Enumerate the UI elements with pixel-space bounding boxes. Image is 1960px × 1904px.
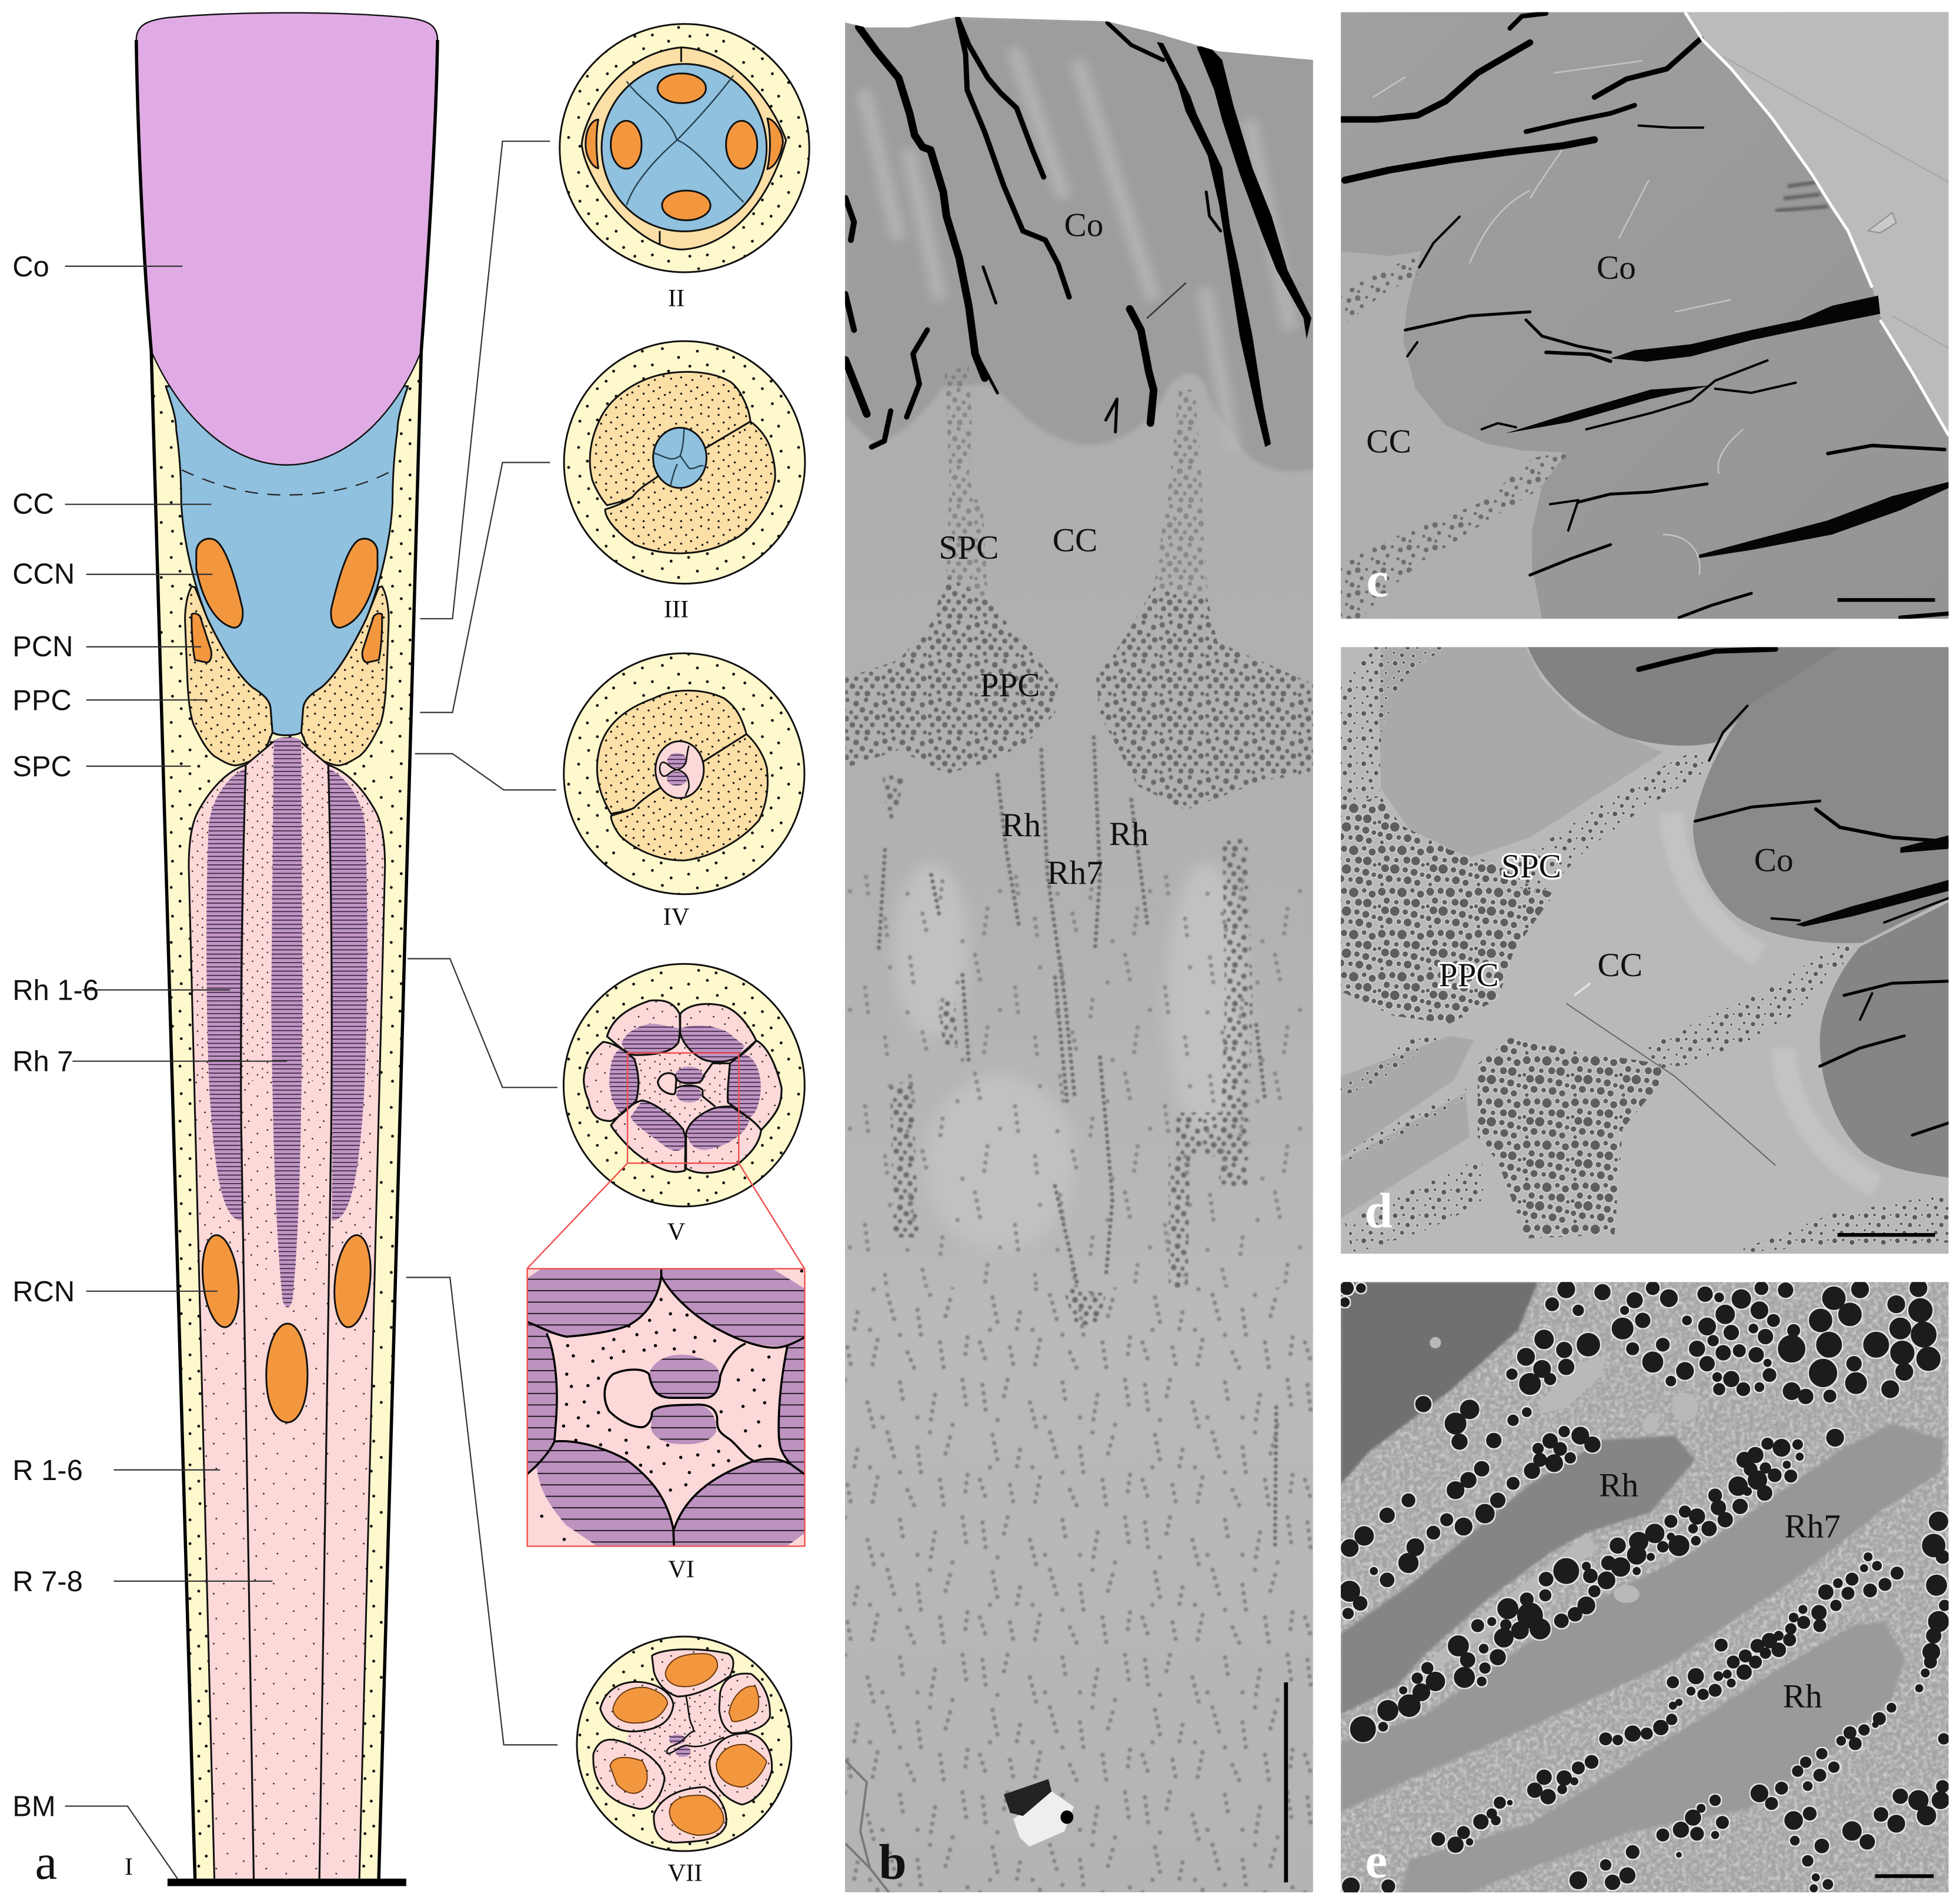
six cells [593,1649,772,1843]
cell outlines [584,1000,782,1173]
cornea tissue [846,18,1316,472]
leader lines and labels: Co [12,251,49,283]
rhabdom fragments [667,753,687,786]
panel b labels: Co [1064,207,1103,244]
granule clusters [846,366,1313,810]
wide cracks [1506,296,1949,558]
label VII: VII [667,1859,702,1887]
granule streams [1341,255,1570,619]
wide fractures [1157,42,1311,447]
cone divisions [654,429,703,486]
lighter rhabdom areas [894,863,1246,1250]
specimen edge gap [1685,12,1949,435]
panel d labels: SPC [1501,848,1561,885]
panel letter d: d [1365,1183,1393,1238]
nuclei [586,74,783,221]
light scratches [1373,61,1744,575]
panel b labels: Rh [1001,807,1041,844]
panel b labels: PPC [980,667,1040,704]
rhabdom regions [1341,647,1663,1218]
section IV [564,653,804,894]
panel b labels [939,207,1148,891]
outer ring [564,653,804,894]
granule streams [1341,647,1949,1254]
retinula cell boundaries [241,765,332,1879]
basement membrane bar [168,1879,406,1886]
lens top [1528,647,1840,746]
pale vacuoles [1409,1337,1698,1678]
cornea light streaks [863,48,1291,450]
primary pigment cells [185,586,389,766]
panel d labels: CC [1598,947,1642,984]
dark shading at rim [1775,182,1828,211]
leader lines and labels: PCN [12,631,73,663]
leader lines and labels: R 7-8 [12,1566,83,1598]
debris dot [1060,1811,1073,1824]
inset frame [527,1269,804,1546]
leader lines and labels: Rh 1-6 [12,975,99,1007]
connector lines to sections [406,141,557,1745]
panel e labels: Rh [1783,1678,1822,1715]
panel letter e: e [1365,1833,1387,1889]
cone cells [602,64,767,232]
light halos by lenses [1671,813,1876,1185]
granule clusters [1341,797,1663,1238]
panel b labels: Rh7 [1047,854,1103,891]
lens lower right [1820,902,1949,1178]
crystalline cone [166,386,408,735]
cone background [1341,647,1949,1254]
label IV: IV [663,903,690,931]
label V: V [667,1218,686,1246]
panel d labels [1439,842,1794,994]
pigment granules [1340,1280,1949,1895]
leader lines and labels: SPC [12,751,72,783]
rhabdom 1-6 left [206,769,245,1221]
scale bar b [1284,1682,1288,1882]
panel b labels: CC [1053,522,1097,559]
lumen crease [1566,1004,1775,1165]
panel e: rhabdom micrograph [1340,1280,1949,1895]
retinula core [656,741,704,798]
panel a: longitudinal ommatidium diagram [12,13,438,1890]
section label I: I [125,1853,133,1880]
pigment cell lower [611,734,767,860]
dense granule strips [883,775,1253,1325]
cornea base [1341,12,1949,619]
pigment granules [542,1271,802,1539]
dispersed granules [845,875,1314,1892]
panel b labels: Rh [1109,816,1148,853]
retinula cell outline [189,739,385,1879]
hatch background [527,1269,804,1546]
panel d: pigment cell micrograph [1341,647,1949,1254]
central cell [547,1276,790,1529]
panel e labels [1599,1467,1841,1715]
pigment cell lower [605,422,775,553]
scale bar e [1875,1874,1934,1878]
leader lines and labels: BM [12,1791,56,1823]
panel e labels: Rh7 [1784,1508,1841,1545]
rhabdom 1-6 right [329,769,368,1221]
section II [560,24,809,272]
section VI inset [527,1269,804,1546]
thin diagonal lines [1723,56,1949,348]
crystalline cone area [1341,251,1566,619]
panel c labels [1366,249,1636,460]
leader lines and labels: Rh 7 [12,1046,74,1078]
panel c labels: CC [1366,423,1411,460]
dark tissue corner [1341,1282,1538,1484]
panel letter a: a [35,1835,57,1890]
debris black [1004,1779,1051,1816]
six retinula cells [584,1000,782,1173]
small rhabdom fragments [669,1735,691,1757]
scale bar d [1838,1233,1935,1237]
pink corners [527,1269,804,1546]
leader lines and labels: CCN [12,559,75,590]
section V [563,964,804,1207]
rhabdom upper [1341,1436,1695,1715]
cornea [136,13,438,465]
outer ring [564,341,805,584]
rhabdom R7 [1341,1424,1945,1812]
nuclei [610,1654,767,1835]
cell divisions [626,75,743,205]
primary pigment ring [582,48,786,249]
rhabdom 7 central [271,737,302,1307]
debris white [1013,1791,1074,1846]
central retinula [626,1680,743,1811]
outer side walls [136,40,438,1879]
small debris [1868,213,1896,233]
retinula cells stipple [189,743,385,1879]
leader lines and labels: RCN [12,1276,75,1308]
cytoplasm base [1341,1282,1949,1892]
primary pigment cell nuclei [192,613,382,663]
leader lines and labels [12,251,287,1879]
basement crease [846,1761,889,1893]
label II: II [668,285,685,312]
leader lines and labels: CC [12,489,54,520]
section VII [577,1636,792,1851]
section III [564,341,805,584]
cornea fractures [846,18,1221,447]
cytoplasm speckle [1341,1282,1949,1892]
scale bar c [1838,598,1935,602]
outer ring [577,1636,792,1851]
panel b labels: SPC [939,529,999,566]
panel e labels: Rh [1599,1467,1638,1504]
leader lines and labels: R 1-6 [12,1455,83,1487]
rhabdom lower [1401,1622,1904,1892]
label VI: VI [668,1556,694,1584]
panel c: cornea micrograph [1341,12,1949,619]
panel b: longitudinal micrograph [845,12,1316,1893]
small folds [1574,983,1590,996]
central rhabdom fragments [649,1355,720,1444]
background right [1685,12,1949,437]
cracks [1639,649,1949,1135]
pigment cell upper [590,372,750,505]
wide cracks [1796,836,1949,927]
panel letter b: b [879,1835,907,1890]
pigment cell upper [597,690,746,814]
panel d labels: PPC [1439,957,1499,994]
central outlines [667,1696,724,1753]
panel c labels: Co [1597,249,1636,286]
label III: III [664,596,689,623]
panel letter c: c [1367,552,1388,607]
background tissue [845,12,1314,1892]
leader lines and labels: PPC [12,684,72,716]
granule streams [879,737,1276,1549]
outer ring [563,964,804,1207]
rhabdom blobs [609,1024,761,1151]
panel d labels: Co [1754,842,1794,879]
cell outlines [527,1269,804,1546]
cone boundary dashed arc [182,470,393,495]
core outlines [660,746,689,796]
central retinula [617,1014,742,1154]
outer ring [560,24,809,272]
cracks [1341,14,1949,617]
retinula cell nuclei [198,1233,375,1422]
ring divisions [660,48,681,245]
lens right [1693,647,1949,943]
cone cell nuclei [196,539,378,627]
zoom frame and guide lines [527,1053,804,1268]
cone tip [653,427,706,488]
secondary pigment cell sheath [151,351,421,1879]
